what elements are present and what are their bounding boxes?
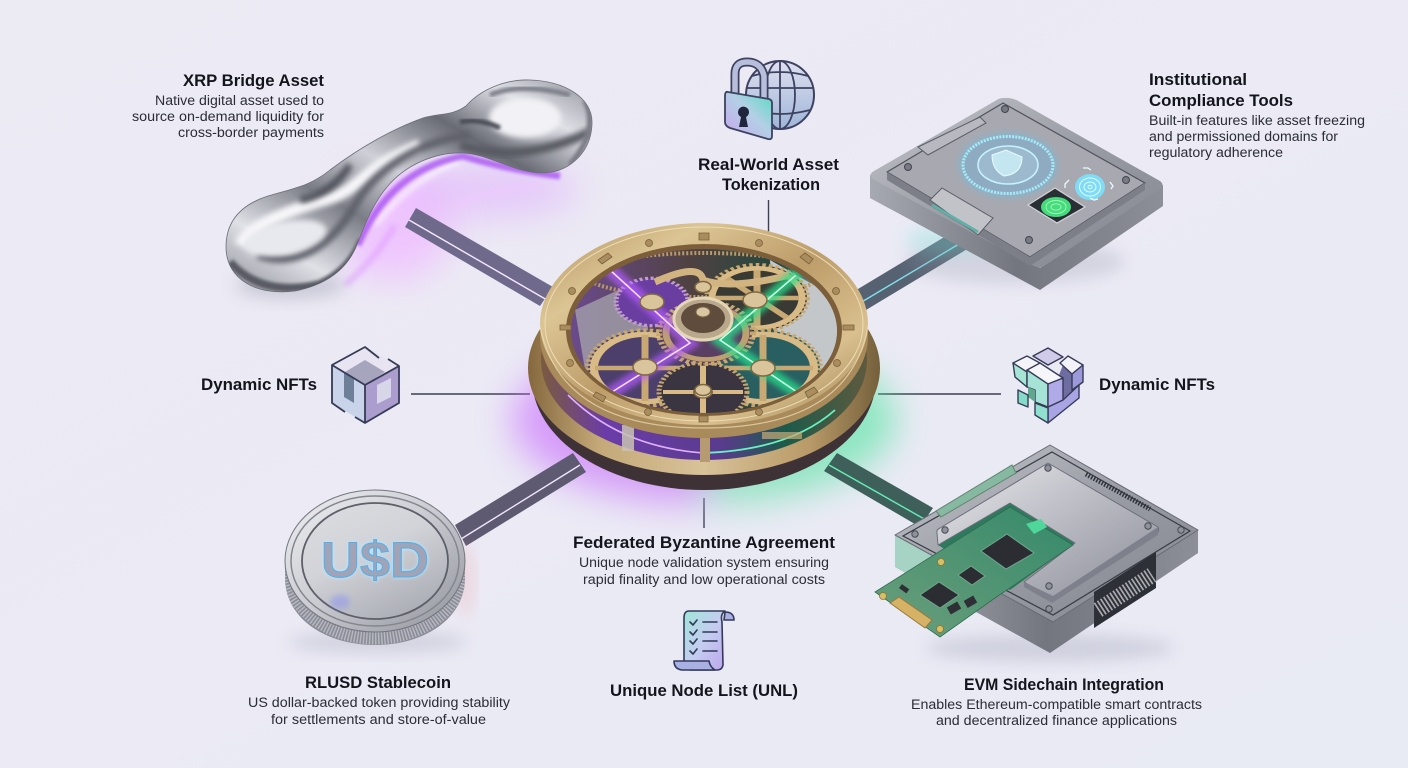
title: institutional compliance tools: and permissioned domains for <box>1149 129 1339 144</box>
purple glow behind liquid metal <box>330 160 580 285</box>
beam: compliance tools to core <box>853 230 969 310</box>
illustration: institutional compliance device <box>870 98 1163 290</box>
title: EVM sidechain integration <box>911 675 1202 728</box>
core bezel screws and numerals <box>560 233 854 422</box>
label: unique node list: Unique Node List (UNL) <box>610 681 798 700</box>
core: federated byzantine clockwork <box>528 223 880 490</box>
core top ring <box>540 223 868 438</box>
title: XRP bridge asset: Native digital asset used to <box>155 93 324 108</box>
title: XRP bridge asset: source on-demand liquidity for <box>132 109 325 124</box>
core mechanism band <box>541 260 867 462</box>
core hub and jewels <box>633 282 775 396</box>
title: federated byzantine agreement: Federated Byzantine Agreement <box>573 533 835 552</box>
connector: thin line to right dynamic NFTs <box>878 393 1001 395</box>
connector: thin line to left dynamic NFTs <box>411 393 530 395</box>
title: XRP bridge asset: cross-border payments <box>178 125 324 140</box>
icon: segmented cube <box>1013 348 1083 423</box>
title: real-world asset tokenization <box>698 155 839 194</box>
module plate <box>937 463 1159 597</box>
title: XRP bridge asset <box>132 71 325 140</box>
title: real-world asset tokenization: Tokenization <box>722 175 820 194</box>
title: RLUSD stablecoin: US dollar-backed token providing stability <box>248 695 510 710</box>
module connector pins <box>1094 552 1156 628</box>
PCB board <box>875 507 1073 637</box>
beam: RLUSD coin to core <box>455 453 586 546</box>
connector: thin line to federated byzantine agreement <box>703 498 705 528</box>
label: dynamic NFTs right: Dynamic NFTs <box>1099 375 1215 394</box>
core lower ring <box>528 261 880 490</box>
gear bottom <box>659 363 747 421</box>
title: federated byzantine agreement: rapid finality and low operational costs <box>583 572 825 587</box>
module opening <box>938 503 1075 590</box>
fingerprint scan: blue <box>1065 168 1113 200</box>
connector: thin line to real-world asset tokenization <box>768 200 770 232</box>
bridge top <box>655 271 790 284</box>
title: federated byzantine agreement <box>573 533 835 587</box>
title: RLUSD stablecoin: RLUSD Stablecoin <box>305 673 451 692</box>
seal: holographic shield <box>958 132 1058 198</box>
module vent slots <box>1086 474 1150 509</box>
gear central <box>659 302 753 364</box>
illustration: XRP liquid metal bridge <box>226 80 592 299</box>
gear lower left <box>588 330 702 406</box>
gear upper right <box>707 265 807 331</box>
light traces <box>610 270 797 392</box>
illustration: EVM sidechain module <box>875 445 1198 662</box>
beam: XRP bridge asset to core <box>405 208 553 306</box>
module heat strip <box>936 465 1016 517</box>
title: institutional compliance tools: Compliance Tools <box>1149 91 1293 110</box>
coin lettering: U$D <box>321 532 429 588</box>
core exposed movement <box>571 249 837 413</box>
icon: checklist scroll <box>674 611 734 670</box>
device tabs <box>918 117 993 235</box>
title: RLUSD stablecoin: for settlements and store-of-value <box>271 712 486 727</box>
title: institutional compliance tools: Built-in features like asset freezing <box>1149 113 1365 128</box>
glow under central mechanism <box>512 336 896 504</box>
title: EVM sidechain integration: Enables Ethereum-compatible smart contracts <box>911 697 1202 712</box>
title: real-world asset tokenization: Real-World Asset <box>698 155 839 174</box>
title: institutional compliance tools: regulatory adherence <box>1149 145 1283 160</box>
fingerprint scan: green window <box>1028 188 1085 223</box>
icon: padlock and globe <box>725 61 814 139</box>
title: EVM sidechain integration: and decentralized finance applications <box>936 713 1177 728</box>
title: institutional compliance tools: Institutional <box>1149 70 1247 89</box>
title: institutional compliance tools <box>1149 70 1365 160</box>
title: RLUSD stablecoin <box>248 673 510 727</box>
title: XRP bridge asset: XRP Bridge Asset <box>183 71 324 90</box>
title: federated byzantine agreement: Unique node validation system ensuring <box>579 555 829 570</box>
icon: translucent cube <box>332 347 399 423</box>
beam: EVM sidechain to core <box>824 453 933 527</box>
core ring highlight <box>540 326 868 428</box>
gear upper left <box>616 278 688 326</box>
illustration: RLUSD coin <box>285 490 473 653</box>
title: EVM sidechain integration: EVM Sidechain Integration <box>964 675 1164 694</box>
gear lower right <box>706 330 820 406</box>
label: dynamic NFTs left: Dynamic NFTs <box>201 375 317 394</box>
